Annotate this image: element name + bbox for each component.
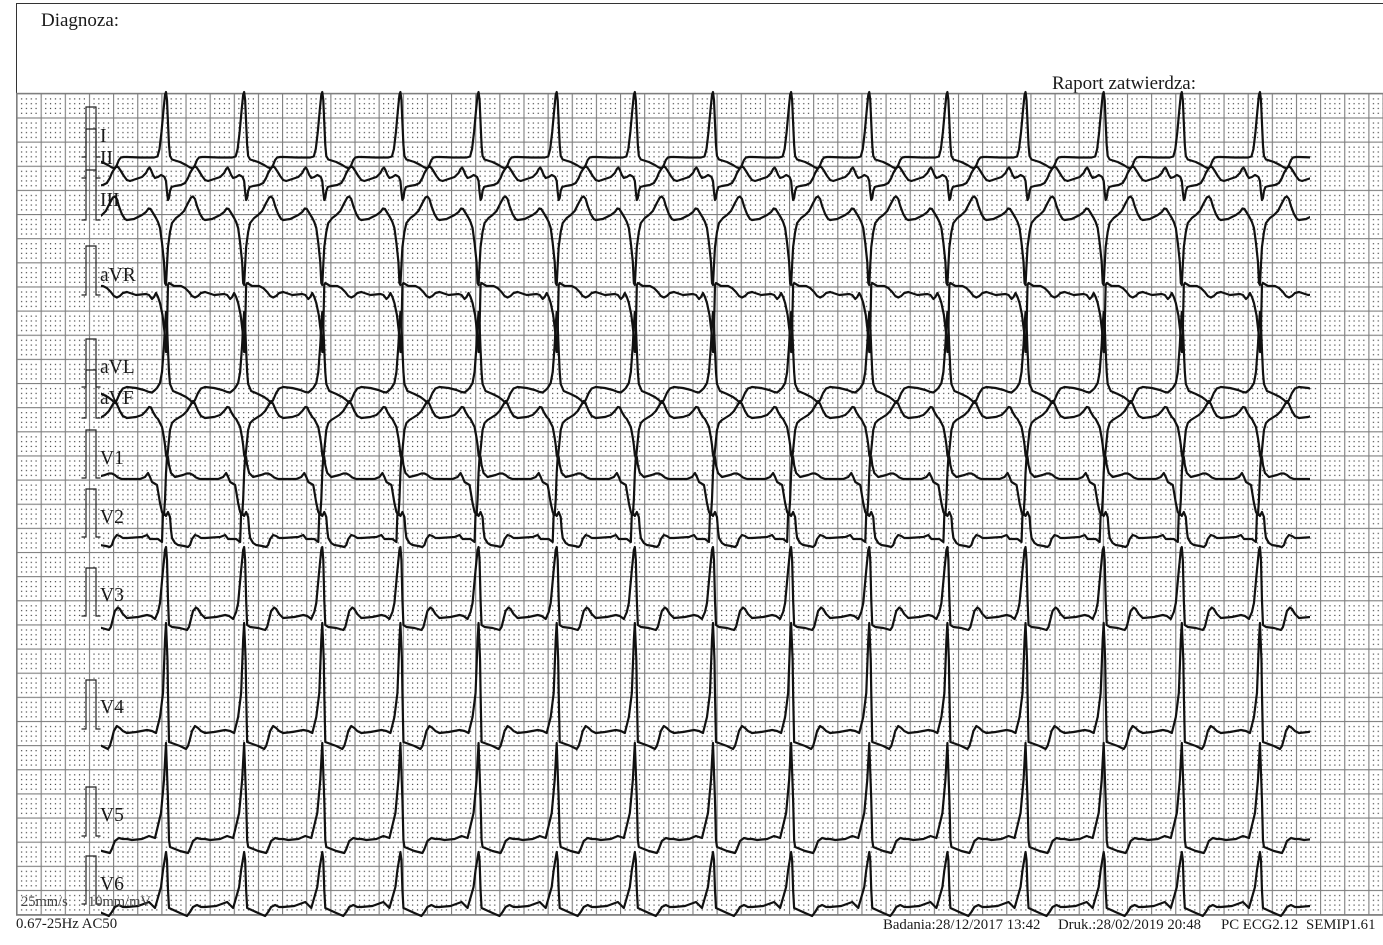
calibration pulses [82, 107, 100, 904]
gain label: 10mm/mV [88, 894, 151, 910]
trace: lead I [49, 92, 1377, 168]
exam date: Badania:28/12/2017 13:42 [883, 917, 1040, 933]
lead labels: V2 [100, 507, 124, 528]
trace: lead V1 [49, 457, 1377, 515]
trace: lead V2 [49, 512, 1377, 547]
lead labels: aVF [100, 388, 134, 409]
lead labels: V1 [100, 448, 124, 469]
lead labels: III [100, 190, 119, 211]
lead labels: V6 [100, 874, 124, 895]
lead labels: aVL [100, 357, 135, 378]
lead labels: V4 [100, 697, 124, 718]
trace: lead II [49, 166, 1377, 200]
software version: PC ECG2.12 [1221, 917, 1298, 933]
trace: lead aVL [49, 312, 1377, 403]
trace: lead V3 [49, 547, 1377, 630]
print date: Druk.:28/02/2019 20:48 [1058, 917, 1201, 933]
trace: lead aVF [49, 401, 1377, 458]
filter settings: 0.67-25Hz AC50 [16, 916, 117, 932]
lead labels: I [100, 126, 106, 147]
trace: lead V5 [49, 743, 1377, 853]
device version: SEMIP1.61 [1306, 917, 1375, 933]
trace: lead V4 [49, 623, 1377, 749]
heading: report approval: Raport zatwierdza: [1052, 73, 1196, 94]
lead labels: V5 [100, 805, 124, 826]
lead labels: aVR [100, 265, 136, 286]
lead labels [100, 126, 136, 895]
heading: Diagnoza: Diagnoza: [41, 10, 119, 31]
panel: diagnosis header [16, 4, 1383, 93]
lead labels: V3 [100, 585, 124, 606]
paper speed label: 25mm/s [21, 894, 68, 910]
trace: lead aVR [49, 283, 1377, 352]
trace: lead V6 [49, 852, 1377, 916]
lead labels: II [100, 148, 113, 169]
trace: lead III [49, 196, 1377, 285]
